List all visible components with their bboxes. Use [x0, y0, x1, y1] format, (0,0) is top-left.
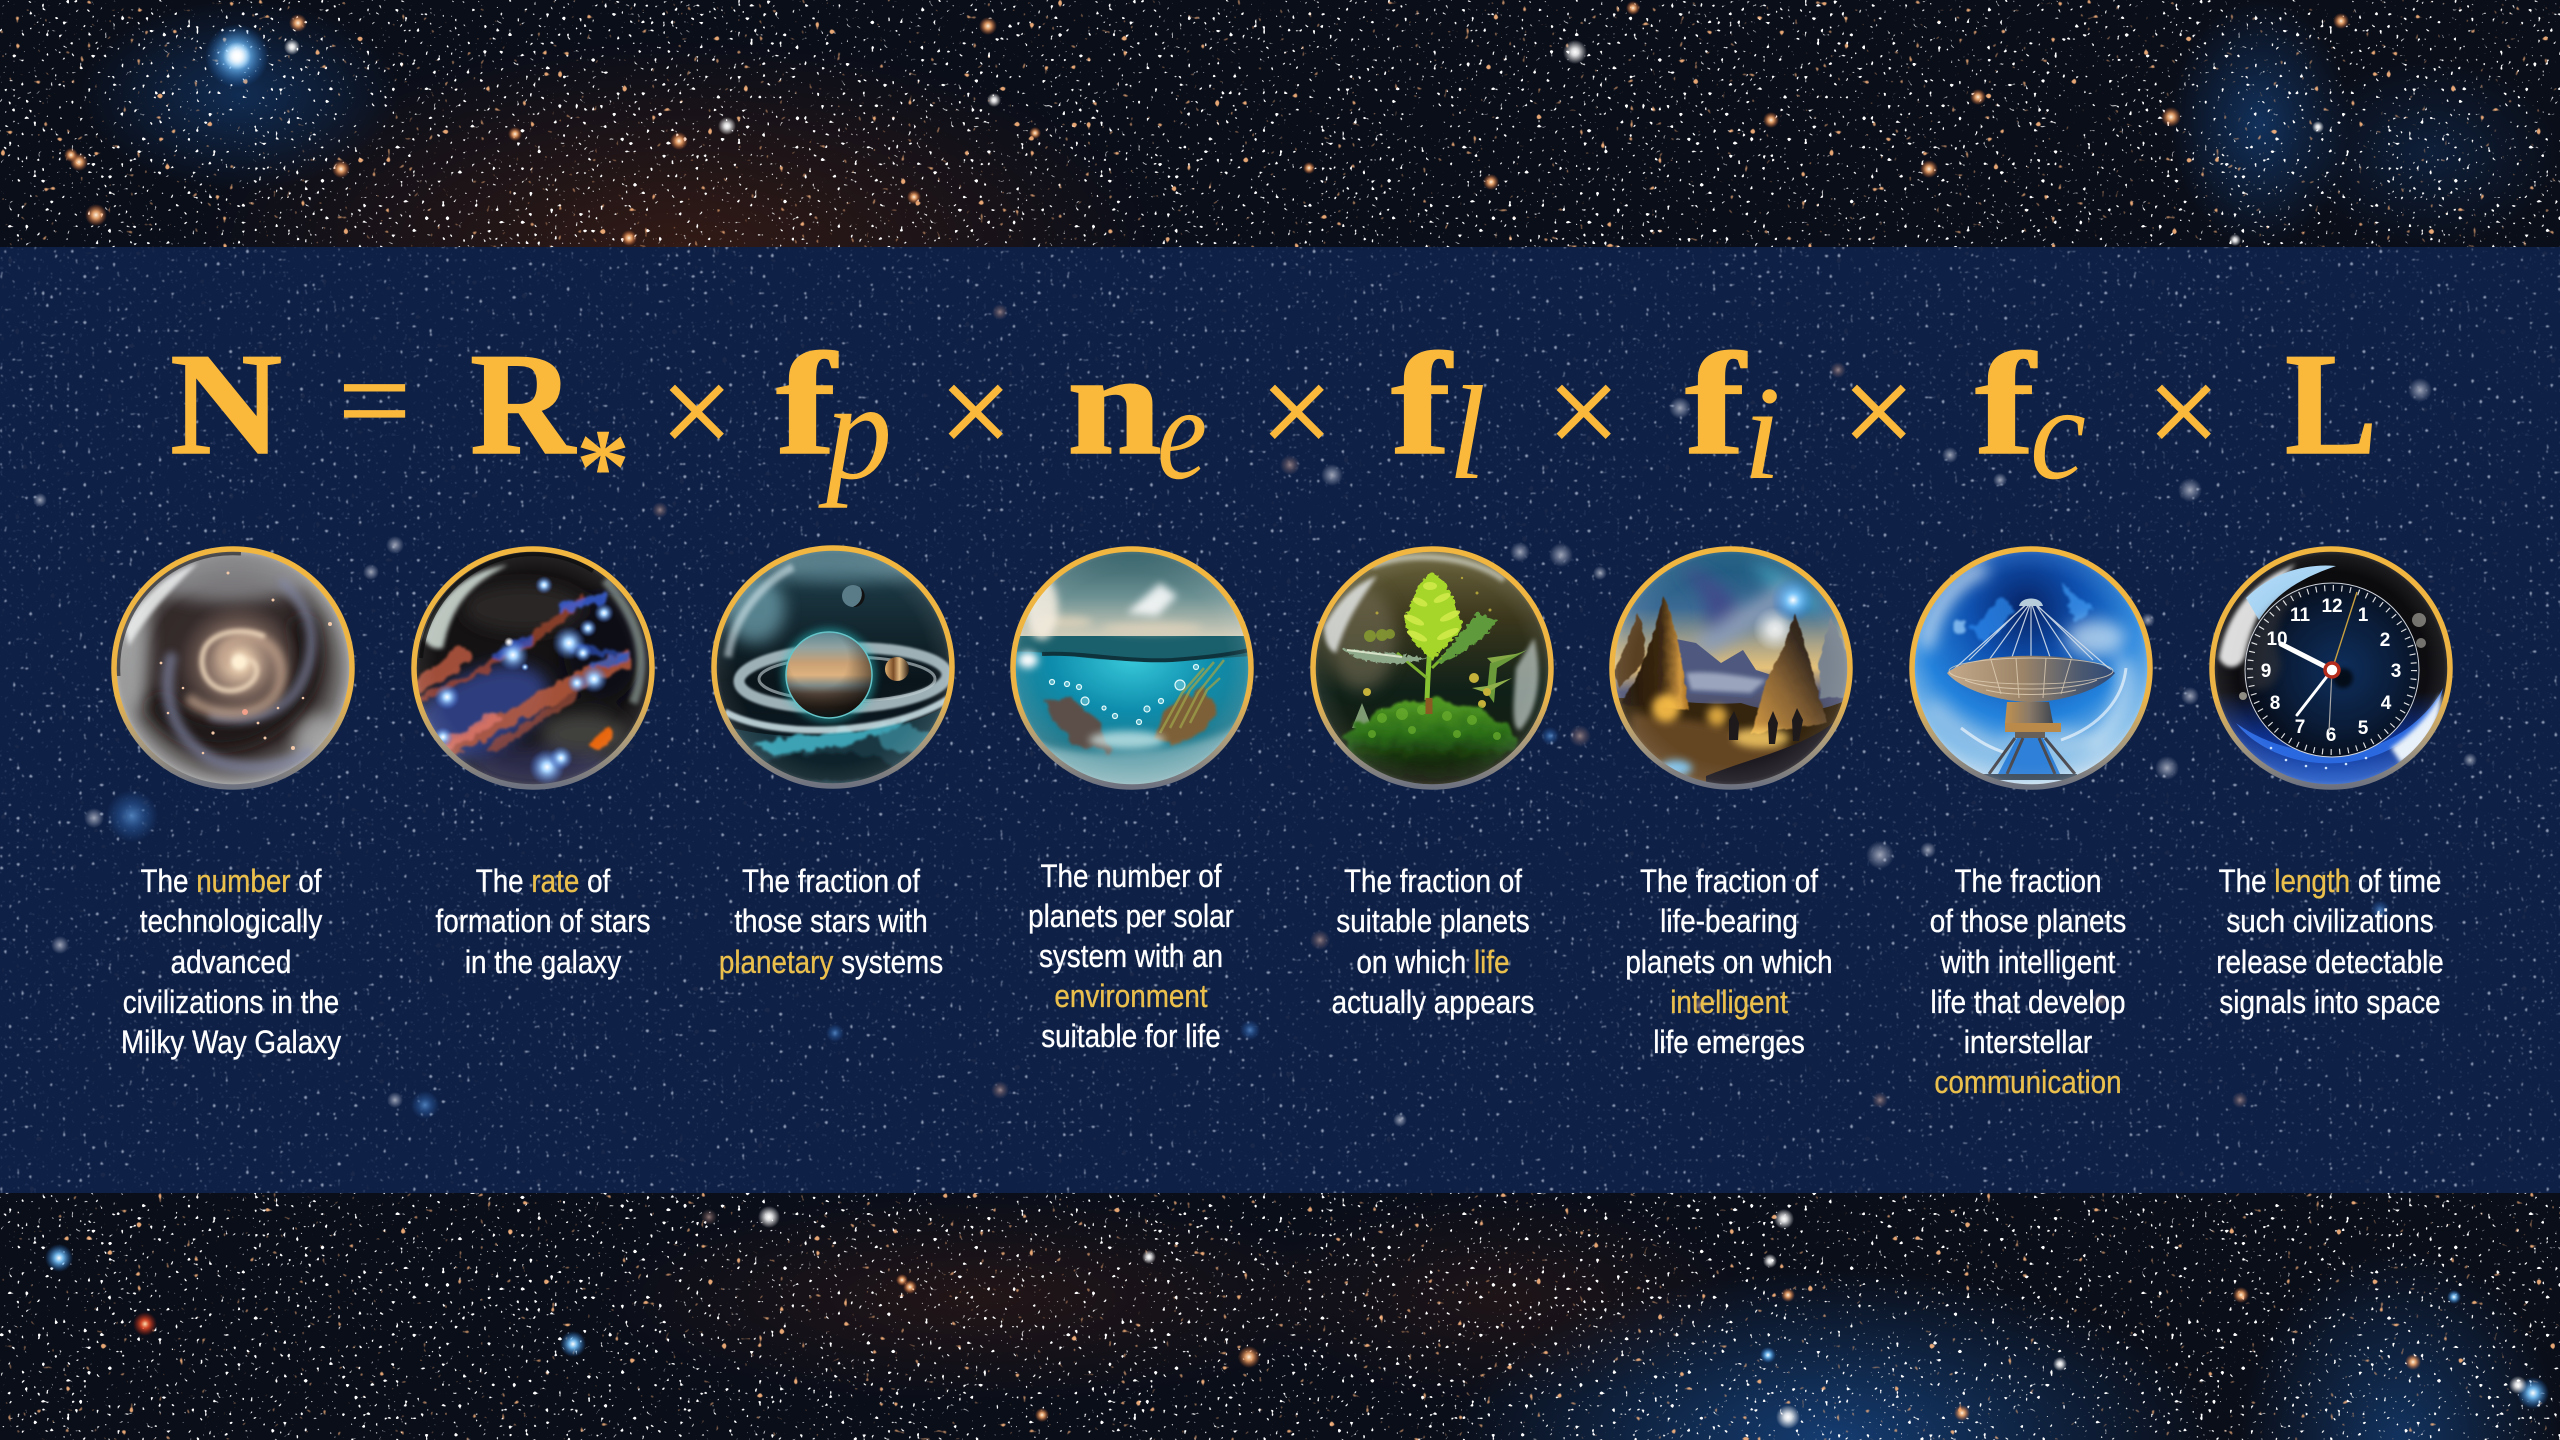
caption: planets with suitable environment: planets per solar: [1028, 899, 1234, 934]
icon: glass sphere with planetary system: [713, 547, 953, 792]
icon: glass sphere with radio telescope: [1911, 548, 2151, 788]
caption: number of civilizations: Milky Way Galaxy: [121, 1025, 341, 1060]
caption: length of time: release detectable: [2216, 945, 2444, 980]
caption: number of civilizations: technologically: [140, 904, 322, 939]
term f sub l: [1391, 323, 1486, 507]
multiplication sign 2: ×: [939, 340, 1012, 484]
icon: glass sphere with clock face: 11: [2290, 605, 2310, 626]
caption: rate of star formation: The rate of: [476, 864, 610, 899]
term R star: [470, 323, 630, 527]
multiplication sign 1: ×: [660, 340, 733, 484]
icon: glass sphere with clock face: 6: [2326, 725, 2336, 746]
caption: fraction where life appears: suitable planets: [1336, 904, 1530, 939]
icon: glass sphere with clock face: 1: [2358, 605, 2369, 626]
multiplication sign 6: ×: [2147, 340, 2220, 484]
caption: fraction with intelligent life: life-bearing: [1660, 904, 1798, 939]
term n sub e: [1067, 323, 1207, 507]
caption: fraction with intelligent life: life emerges: [1653, 1025, 1805, 1060]
caption: rate of star formation: formation of stars: [435, 904, 651, 939]
term f sub p: f: [776, 323, 839, 485]
term f sub i: f: [1685, 323, 1748, 485]
term f sub i: [1685, 323, 1781, 507]
multiplication sign 5: ×: [1842, 340, 1915, 484]
term f sub c: c: [2030, 359, 2086, 507]
term f sub p: p: [818, 354, 892, 509]
caption: planets with suitable environment: The number of: [1040, 859, 1222, 894]
caption: fraction with communication: communication: [1934, 1065, 2122, 1100]
caption: length of time: The length of time: [2219, 864, 2441, 899]
caption: fraction with intelligent life: The fraction of: [1640, 864, 1819, 899]
icon: glass sphere with star-forming nebula: [393, 548, 653, 790]
caption: fraction with intelligent life: planets on which: [1625, 945, 1833, 980]
caption: fraction where life appears: The fraction of: [1344, 864, 1523, 899]
caption: fraction with planets: The fraction of: [742, 864, 921, 899]
icon: glass sphere with clock face: 7: [2295, 717, 2305, 738]
term f sub l: f: [1391, 323, 1454, 485]
term f sub c: [1975, 323, 2086, 507]
term f sub l: l: [1448, 359, 1486, 507]
term f sub p: [776, 323, 892, 509]
caption: number of civilizations: The number of: [140, 864, 322, 899]
icon: glass sphere with clock face: 12: [2321, 596, 2343, 617]
icon: glass sphere with spiral galaxy: [113, 548, 353, 788]
caption: rate of star formation: in the galaxy: [465, 945, 621, 980]
icon: glass sphere with ocean water: [1012, 548, 1252, 793]
caption: length of time: such civilizations: [2226, 904, 2434, 939]
icon: glass sphere with alien landscape and figures: [1611, 548, 1851, 793]
caption: fraction where life appears: actually appears: [1332, 985, 1534, 1020]
caption: fraction where life appears: on which life: [1356, 945, 1510, 980]
caption: number of civilizations: civilizations in the: [123, 985, 339, 1020]
icon: glass sphere with green plant on moss: [1312, 548, 1552, 788]
caption: planets with suitable environment: system with an: [1039, 939, 1223, 974]
icon: glass sphere with clock face: [2211, 548, 2451, 788]
caption: fraction with intelligent life: intelligent: [1670, 985, 1788, 1020]
term f sub c: f: [1975, 323, 2038, 485]
equals sign: =: [338, 329, 411, 473]
term n sub e: e: [1157, 359, 1207, 507]
equation title: N = R* x fp x ne x fl x fi x fc x L: [170, 323, 2377, 527]
caption: length of time: signals into space: [2219, 985, 2441, 1020]
caption: planets with suitable environment: environment: [1054, 979, 1208, 1014]
term N: N: [170, 323, 282, 485]
multiplication sign 3: ×: [1260, 340, 1333, 484]
caption: fraction with communication: of those planets: [1930, 904, 2126, 939]
caption: fraction with communication: with intelligent: [1940, 945, 2116, 980]
caption: fraction with communication: life that develop: [1931, 985, 2125, 1020]
term L: L: [2285, 323, 2377, 485]
term n sub e: n: [1067, 323, 1162, 485]
panel: translucent navy band: [0, 247, 2560, 1193]
icon: glass sphere with clock face: 9: [2261, 661, 2271, 682]
icon: glass sphere with clock face: 2: [2380, 630, 2390, 651]
term R star: R: [470, 323, 577, 485]
term R star: *: [576, 408, 630, 527]
caption: fraction with communication: The fraction: [1955, 864, 2101, 899]
caption: fraction with planets: planetary systems: [719, 945, 943, 980]
icon: glass sphere with clock face: 10: [2266, 629, 2288, 650]
caption: planets with suitable environment: suitable for life: [1041, 1019, 1221, 1054]
icon: glass sphere with clock face: 4: [2381, 693, 2392, 714]
term f sub i: i: [1743, 359, 1781, 507]
caption: fraction with planets: those stars with: [734, 904, 928, 939]
caption: number of civilizations: advanced: [171, 945, 291, 980]
icon: glass sphere with clock face: 5: [2358, 718, 2369, 739]
caption: fraction with communication: interstellar: [1964, 1025, 2092, 1060]
icon: glass sphere with clock face: 8: [2270, 693, 2280, 714]
icon: glass sphere with clock face: 3: [2391, 661, 2401, 682]
multiplication sign 4: ×: [1547, 340, 1620, 484]
